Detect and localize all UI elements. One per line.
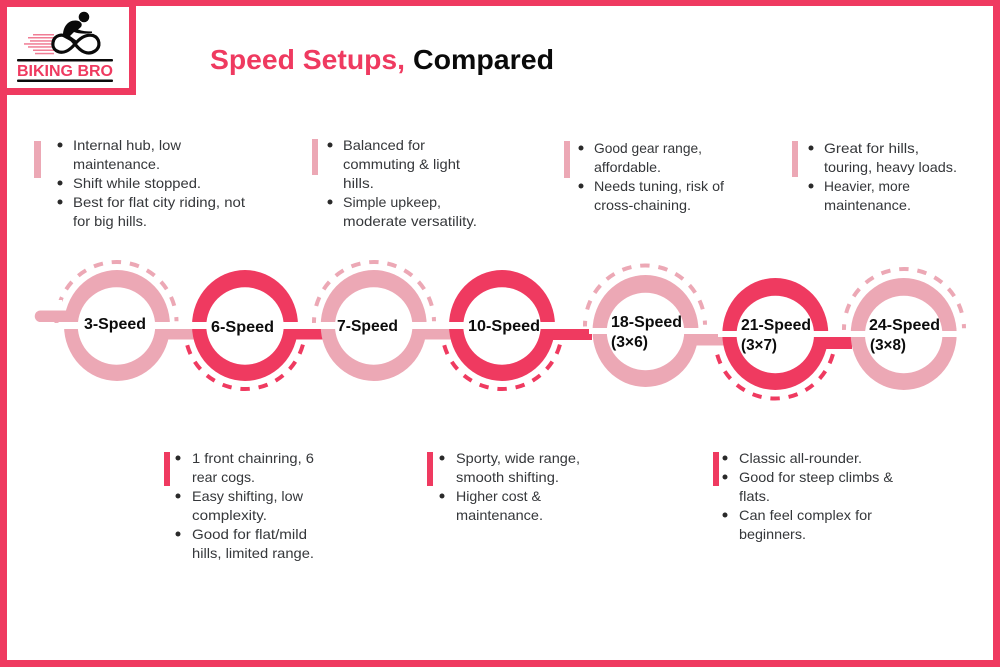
step: 18-Speed — [584, 265, 706, 387]
notes: 10-Speed: Sporty, wide range, — [456, 450, 580, 466]
notes: 6-Speed: Easy shifting, low — [192, 488, 304, 504]
notes: 7-Speed: Simple upkeep, — [343, 194, 441, 210]
icon: cyclist — [53, 12, 99, 53]
notes: 21-Speed: flats. — [739, 488, 770, 504]
step: 6-Speed — [171, 255, 319, 403]
notes: 24-Speed: Great for hills, — [824, 140, 919, 156]
notes: 24-Speed: touring, heavy loads. — [824, 159, 957, 175]
step: 21-Speed: 21-Speed — [741, 317, 811, 334]
notes: 18-Speed: Needs tuning, risk of — [594, 178, 724, 194]
notes: 21-Speed: beginners. — [739, 526, 806, 542]
step: 21-Speed: (3×7) — [741, 337, 777, 354]
notes: 6-Speed: hills, limited range. — [192, 545, 314, 561]
notes: 7-Speed: commuting & light — [343, 156, 460, 172]
notes: 7-Speed: hills. — [343, 175, 374, 191]
connector — [35, 310, 66, 322]
step: 7-Speed: 7-Speed — [337, 318, 398, 335]
notes: 6-Speed: Good for flat/mild — [192, 526, 307, 542]
notes: 7-Speed: Balanced for — [343, 137, 425, 153]
notes: 18-Speed: Good gear range, — [594, 140, 702, 156]
connector — [816, 337, 852, 349]
connector — [290, 329, 324, 340]
step: 7-Speed — [313, 261, 435, 383]
notes: 6-Speed: 1 front chainring, 6 — [192, 450, 314, 466]
step: 18-Speed: (3×6) — [611, 334, 648, 351]
step: 6-Speed: 6-Speed — [211, 319, 274, 336]
notes: 24-Speed: maintenance. — [824, 197, 911, 213]
step: 21-Speed — [701, 265, 849, 412]
notes: 21-Speed: Classic all-rounder. — [739, 450, 862, 466]
notes: 3-Speed: Internal hub, low — [73, 137, 182, 153]
connector — [150, 329, 194, 340]
connector — [420, 329, 454, 340]
connector — [548, 329, 592, 340]
notes: 6-Speed: complexity. — [192, 507, 267, 523]
title: Compared — [413, 44, 554, 75]
rule — [17, 80, 113, 82]
notes: 3-Speed: Shift while stopped. — [73, 175, 201, 191]
step: 18-Speed: 18-Speed — [611, 314, 682, 331]
notes: 24-Speed — [792, 140, 957, 213]
logo: Biking Bro — [4, 4, 132, 92]
notes: 10-Speed: maintenance. — [456, 507, 543, 523]
rule — [17, 59, 113, 62]
step: 10-Speed — [428, 255, 576, 403]
step: 3-Speed — [50, 261, 177, 383]
title — [210, 44, 554, 75]
notes: 3-Speed — [34, 137, 245, 229]
notes: 6-Speed: rear cogs. — [192, 469, 255, 485]
notes: 3-Speed: Best for flat city riding, not — [73, 194, 245, 210]
connector — [690, 334, 724, 346]
notes: 21-Speed: Can feel complex for — [739, 507, 872, 523]
logo wordmark: BIKING BRO — [17, 63, 113, 80]
step: 24-Speed: 24-Speed — [869, 317, 940, 334]
notes: 18-Speed: cross-chaining. — [594, 197, 691, 213]
notes: 21-Speed — [713, 450, 894, 542]
step: 10-Speed: 10-Speed — [468, 318, 540, 335]
notes: 21-Speed: Good for steep climbs & — [739, 469, 894, 485]
title: Speed Setups, — [210, 44, 405, 75]
notes: 3-Speed: maintenance. — [73, 156, 160, 172]
timeline — [35, 255, 965, 412]
icon: speed lines — [24, 34, 54, 54]
notes: 6-Speed — [164, 450, 314, 561]
notes: 10-Speed — [427, 450, 580, 523]
notes: 18-Speed — [564, 140, 724, 213]
notes: 7-Speed: moderate versatility. — [343, 213, 477, 229]
notes: 7-Speed — [312, 137, 477, 229]
notes: 18-Speed: affordable. — [594, 159, 661, 175]
notes: 10-Speed: Higher cost & — [456, 488, 542, 504]
notes: 24-Speed: Heavier, more — [824, 178, 910, 194]
step: 24-Speed: (3×8) — [870, 337, 906, 354]
notes: 3-Speed: for big hills. — [73, 213, 147, 229]
step: 24-Speed — [843, 268, 965, 390]
step: 3-Speed: 3-Speed — [84, 316, 146, 333]
notes: 10-Speed: smooth shifting. — [456, 469, 559, 485]
